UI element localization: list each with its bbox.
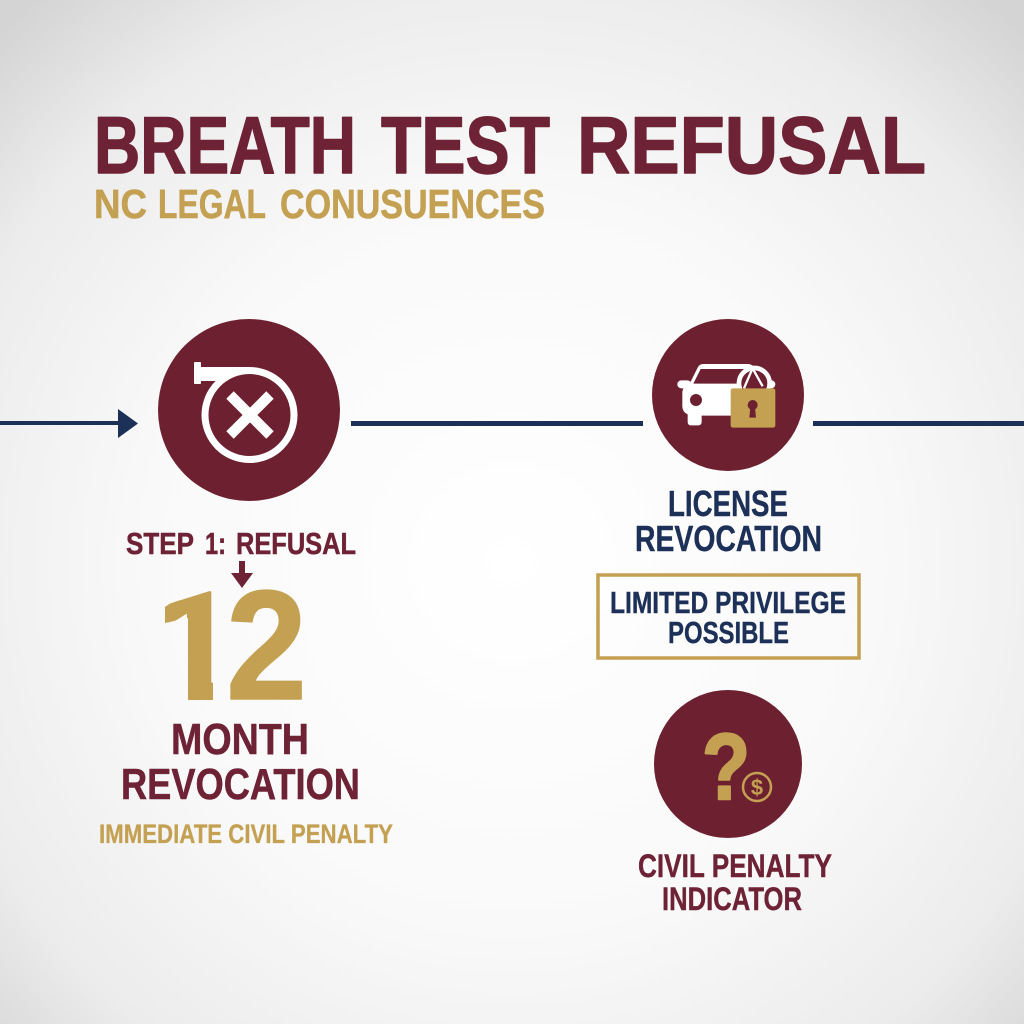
step 1 label: STEP xyxy=(126,526,194,561)
big number 12 xyxy=(165,589,302,700)
title xyxy=(94,101,926,191)
title: REFUSAL xyxy=(577,101,926,191)
title: TEST xyxy=(381,101,550,191)
icon: breath test refusal xyxy=(158,319,340,501)
big number 12: 2 xyxy=(226,559,307,733)
civil penalty indicator label: CIVIL PENALTY xyxy=(638,848,832,884)
step 1 label: 1: xyxy=(205,526,226,561)
callout: limited privilege possible xyxy=(598,575,859,658)
icon: car with padlock xyxy=(652,319,804,471)
subtitle xyxy=(94,181,545,227)
big number 12: 1 xyxy=(152,560,239,734)
arrow: step 1 down to 12 xyxy=(231,561,253,588)
icon: civil penalty question mark and dollar coin xyxy=(654,690,802,838)
callout: limited privilege possible: POSSIBLE xyxy=(668,615,789,650)
arrow: timeline entry xyxy=(0,409,138,438)
license revocation label: REVOCATION xyxy=(635,518,822,559)
license revocation label: LICENSE xyxy=(668,483,788,524)
icon: civil penalty question mark and dollar coin: ? xyxy=(702,714,750,819)
timeline connector: step 1 to license revocation xyxy=(351,421,643,426)
civil penalty indicator label: INDICATOR xyxy=(662,881,802,917)
subtitle: LEGAL xyxy=(158,181,266,227)
step 1 label: REFUSAL xyxy=(236,526,356,561)
month revocation label: REVOCATION xyxy=(121,760,360,809)
timeline connector: exit xyxy=(813,421,1024,426)
license revocation label xyxy=(635,483,822,559)
subtitle: NC xyxy=(94,181,147,227)
month revocation label xyxy=(121,715,360,809)
month revocation label: MONTH xyxy=(171,715,309,764)
immediate civil penalty note: IMMEDIATE CIVIL PENALTY xyxy=(99,819,393,849)
icon: civil penalty question mark and dollar coin: $ xyxy=(751,775,763,800)
subtitle: CONUSUENCES xyxy=(280,181,545,227)
title: BREATH xyxy=(94,101,356,191)
callout: limited privilege possible: LIMITED PRIVILEGE xyxy=(610,585,846,620)
step 1 label xyxy=(126,526,356,561)
civil penalty indicator label xyxy=(638,848,832,917)
